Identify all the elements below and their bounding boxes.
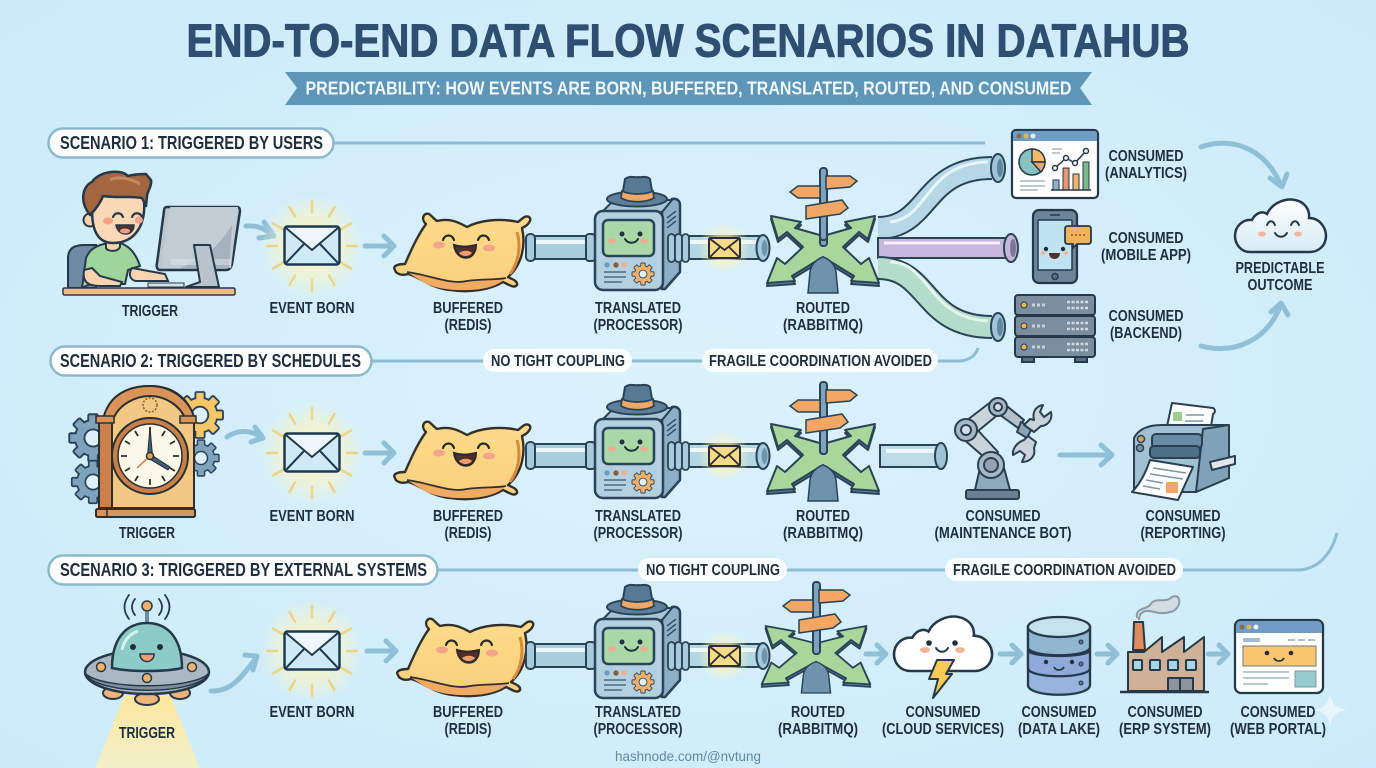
- label: consumed backend: CONSUMED: [1108, 308, 1184, 325]
- scenario 2 heading: [50, 346, 978, 376]
- label: consumed erp system: [1119, 704, 1211, 738]
- label: routed 2: (RABBITMQ): [783, 525, 863, 542]
- label: routed 3: (RABBITMQ): [778, 721, 858, 738]
- label: predictable outcome: PREDICTABLE: [1236, 260, 1325, 277]
- icon: pillow buffer 1: [394, 214, 530, 291]
- icon: router 2: [767, 382, 879, 501]
- label: routed 1: ROUTED: [796, 300, 850, 317]
- arrow: event to buffer 1: [365, 236, 394, 256]
- label: consumed web portal: [1230, 704, 1326, 738]
- label: consumed mobile app: (MOBILE APP): [1101, 247, 1191, 264]
- label: translated 2: TRANSLATED: [595, 508, 681, 525]
- label: translated 2: [594, 508, 682, 542]
- label: buffered 3: [433, 704, 503, 738]
- label: consumed analytics: [1105, 148, 1187, 182]
- label: consumed maintenance bot: CONSUMED: [966, 508, 1040, 525]
- icon: processor and pipes 1: [526, 177, 770, 290]
- label: translated 1: [594, 300, 682, 334]
- label: buffered 2: BUFFERED: [433, 508, 503, 525]
- label: routed 1: (RABBITMQ): [783, 317, 863, 334]
- icon: mobile phone: [1033, 210, 1091, 283]
- arrow: to outcome top: [1201, 143, 1287, 187]
- scenario 2 heading: SCENARIO 2: TRIGGERED BY SCHEDULES: [60, 351, 361, 371]
- callout: no tight coupling 3: NO TIGHT COUPLING: [646, 562, 780, 579]
- scenario 1 heading: SCENARIO 1: TRIGGERED BY USERS: [60, 133, 323, 153]
- label: consumed reporting: CONSUMED: [1146, 508, 1220, 525]
- label: buffered 3: (REDIS): [444, 721, 492, 738]
- callout: no tight coupling 2: [483, 349, 632, 372]
- label: routed 1: [783, 300, 863, 334]
- icon: maintenance robot arm: [955, 398, 1051, 499]
- label: buffered 1: BUFFERED: [433, 300, 503, 317]
- label: routed 3: ROUTED: [791, 704, 845, 721]
- label: consumed web portal: CONSUMED: [1240, 704, 1316, 721]
- label: event born 2: EVENT BORN: [270, 508, 354, 525]
- icon: event envelope 2: [260, 401, 364, 505]
- callout: fragile coordination 2: FRAGILE COORDINATION AVOIDED: [709, 353, 932, 370]
- label: consumed cloud services: (CLOUD SERVICES): [882, 721, 1004, 738]
- label: translated 3: [594, 704, 682, 738]
- label: consumed data lake: [1018, 704, 1100, 738]
- label: buffered 3: BUFFERED: [433, 704, 503, 721]
- label: translated 3: TRANSLATED: [595, 704, 681, 721]
- label: consumed mobile app: [1101, 230, 1191, 264]
- callout: fragile coordination 2: [702, 349, 938, 372]
- arrow: clock to event: [227, 427, 263, 442]
- icon: ufo with beam: [85, 595, 209, 768]
- arrow: ufo to event: [211, 655, 257, 691]
- label: translated 1: (PROCESSOR): [594, 317, 682, 334]
- icon: grandfather clock with gears: [69, 386, 223, 517]
- icon: web portal: [1235, 620, 1323, 693]
- icon: outcome cloud: [1235, 200, 1326, 252]
- label: buffered 2: (REDIS): [444, 525, 492, 542]
- label: consumed analytics: CONSUMED: [1108, 148, 1184, 165]
- label: buffered 1: [433, 300, 503, 334]
- arrow: router to cloud: [866, 645, 886, 663]
- label: consumed erp system: CONSUMED: [1128, 704, 1202, 721]
- label: consumed cloud services: CONSUMED: [906, 704, 980, 721]
- arrow: to outcome bottom: [1201, 303, 1288, 349]
- label: event born 1: EVENT BORN: [270, 300, 354, 317]
- callout: no tight coupling 3: [638, 558, 787, 581]
- icon: processor and pipes 3: [526, 585, 770, 698]
- label: consumed reporting: [1140, 508, 1226, 542]
- callout: no tight coupling 2: NO TIGHT COUPLING: [491, 353, 625, 370]
- subtitle ribbon: PREDICTABILITY: HOW EVENTS ARE BORN, BUFFERED, TRANSLATED, ROUTED, AND CONSUMED: [306, 78, 1072, 98]
- label: routed 2: [783, 508, 863, 542]
- title: END-TO-END DATA FLOW SCENARIOS IN DATAHUB: [186, 14, 1190, 66]
- label: event born 3: EVENT BORN: [270, 704, 354, 721]
- icon: pillow buffer 3: [397, 619, 533, 696]
- label: predictable outcome: [1236, 260, 1325, 294]
- scenario 3 heading: SCENARIO 3: TRIGGERED BY EXTERNAL SYSTEMS: [60, 560, 427, 580]
- pipe: router to bot: [880, 443, 947, 469]
- arrow: event to buffer 3: [367, 641, 396, 661]
- label: consumed mobile app: CONSUMED: [1108, 230, 1184, 247]
- icon: router 3: [762, 582, 870, 693]
- icon: pillow buffer 2: [394, 422, 530, 499]
- icon: user at computer: [63, 172, 240, 295]
- label: consumed data lake: CONSUMED: [1022, 704, 1096, 721]
- arrow: user to event: [246, 222, 274, 238]
- label: consumed reporting: (REPORTING): [1140, 525, 1226, 542]
- arrow: lake to erp: [1097, 645, 1117, 663]
- icon: processor and pipes 2: [526, 385, 770, 498]
- arrow: cloud to lake: [1000, 645, 1021, 663]
- label: translated 2: (PROCESSOR): [594, 525, 682, 542]
- icon: data lake cylinder: [1028, 617, 1090, 695]
- arrow: bot to printer: [1060, 445, 1112, 465]
- icon: cloud services: [894, 617, 992, 698]
- label: consumed maintenance bot: (MAINTENANCE BOT): [934, 525, 1072, 542]
- label: trigger 2: TRIGGER: [119, 525, 175, 542]
- arrow: event to buffer 2: [365, 443, 394, 463]
- label: consumed data lake: (DATA LAKE): [1018, 721, 1100, 738]
- icon: event envelope 3: [260, 599, 364, 703]
- footer credit: hashnode.com/@nvtung: [615, 748, 761, 764]
- label: translated 1: TRANSLATED: [595, 300, 681, 317]
- sparkle watermark: [1312, 692, 1348, 728]
- label: routed 2: ROUTED: [796, 508, 850, 525]
- icon: backend servers: [1015, 295, 1095, 362]
- label: trigger 1: TRIGGER: [122, 303, 178, 320]
- scenario 1 heading: [48, 128, 985, 158]
- label: buffered 1: (REDIS): [444, 317, 492, 334]
- subtitle ribbon: [285, 72, 1092, 105]
- arrow: erp to web portal: [1208, 645, 1228, 663]
- label: predictable outcome: OUTCOME: [1248, 277, 1313, 294]
- label: buffered 2: [433, 508, 503, 542]
- label: translated 3: (PROCESSOR): [594, 721, 682, 738]
- icon: router 1: [767, 168, 879, 293]
- label: consumed backend: [1108, 308, 1184, 342]
- callout: fragile coordination 3: FRAGILE COORDINATION AVOIDED: [953, 562, 1176, 579]
- icon: erp factory: [1120, 596, 1209, 692]
- scenario 3 heading: [48, 533, 1337, 584]
- icon: analytics dashboard: [1012, 130, 1098, 198]
- pipes: router to consumers: [878, 154, 1018, 341]
- icon: event envelope 1: [260, 194, 364, 298]
- icon: report printer: [1132, 403, 1235, 500]
- label: consumed analytics: (ANALYTICS): [1105, 165, 1187, 182]
- callout: fragile coordination 3: [945, 558, 1183, 581]
- label: consumed web portal: (WEB PORTAL): [1230, 721, 1326, 738]
- label: consumed maintenance bot: [934, 508, 1072, 542]
- label: trigger 3: TRIGGER: [119, 725, 175, 742]
- label: consumed cloud services: [882, 704, 1004, 738]
- label: routed 3: [778, 704, 858, 738]
- label: consumed erp system: (ERP SYSTEM): [1119, 721, 1211, 738]
- label: consumed backend: (BACKEND): [1110, 325, 1182, 342]
